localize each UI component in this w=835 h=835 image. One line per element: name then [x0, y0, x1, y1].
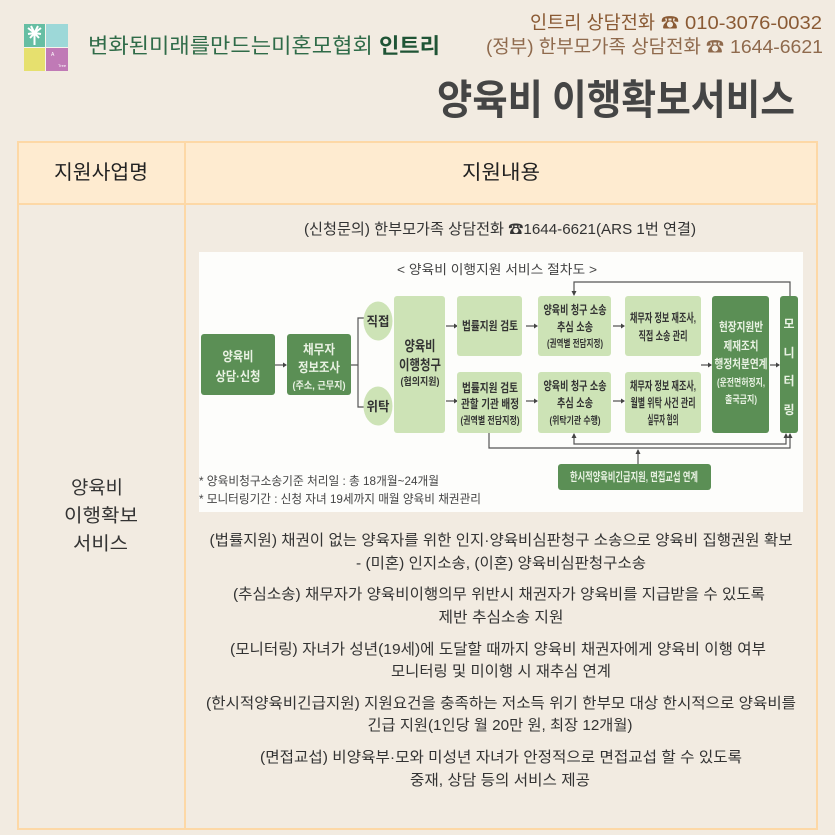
- description: visitation: (면접교섭) 비양육부·모와 미성년 자녀가 안정적으로 면접교섭 할 수 있도록: [260, 749, 742, 766]
- box: field support sanctions: 행정처분연계: [714, 356, 768, 371]
- box: child support claim: 양육비: [404, 338, 436, 354]
- box: claim lawsuit entrusted: 양육비 청구 소송: [544, 378, 606, 393]
- icon: organization logo: Tree: [58, 63, 67, 68]
- flowchart footnotes: * 양육비청구소송기준 처리일 : 총 18개월~24개월: [199, 474, 439, 488]
- description: legal support: (법률지원) 채권이 없는 양육자를 위한 인지·양육비심판청구 소송으로 양육비 집행권원 확보: [210, 532, 793, 549]
- box: debtor information survey: 정보조사: [298, 360, 340, 375]
- description: monitoring: (모니터링) 자녀가 성년(19세)에 도달할 때까지 양육비 채권자에게 양육비 이행 여부: [230, 641, 766, 658]
- title: 양육비: [437, 77, 543, 123]
- description: legal support: [210, 532, 793, 572]
- box: child support claim: [394, 296, 445, 433]
- flowchart footnotes: [199, 474, 481, 506]
- flowchart panel: child support procedure: [199, 252, 803, 512]
- box: field support sanctions: 제재조치: [724, 338, 758, 353]
- box: consultation and application: [201, 334, 275, 395]
- box: field support sanctions: 출국금지): [725, 394, 757, 406]
- title: 이행확보서비스: [552, 77, 795, 123]
- ellipse: direct: 직접: [366, 314, 390, 329]
- box: emergency support link: 한시적양육비긴급지원, 면접교섭 연계: [570, 469, 698, 484]
- phone contact lines: [486, 12, 823, 57]
- flowchart heading: < 양육비 이행지원 서비스 절차도 >: [397, 262, 597, 277]
- phone contact lines: 인트리 상담전화: [530, 12, 655, 33]
- box: claim lawsuit entrusted: (위탁기관 수행): [550, 414, 600, 427]
- description: collection lawsuit: 제반 추심소송 지원: [438, 609, 564, 626]
- service name cell: [64, 477, 138, 554]
- flowchart footnotes: * 모니터링기간 : 신청 자녀 19세까지 매월 양육비 채권관리: [199, 492, 481, 506]
- box: debtor reinvestigation entrusted: [625, 372, 701, 433]
- box: monitoring: 모: [783, 317, 795, 331]
- box: emergency support link: [558, 464, 711, 490]
- box: monitoring: [780, 296, 798, 433]
- table header row: [18, 142, 817, 204]
- box: debtor information survey: (주소, 근무지): [292, 380, 346, 392]
- phone contact lines: (정부) 한부모가족 상담전화: [486, 36, 701, 57]
- box: debtor reinvestigation direct: [625, 296, 701, 356]
- box: claim lawsuit direct: (권역별 전담지정): [547, 337, 603, 350]
- box: monitoring: 터: [783, 374, 795, 388]
- service name cell: 서비스: [73, 533, 128, 554]
- table header row: 지원사업명: [54, 161, 148, 184]
- description: emergency support: [206, 695, 796, 734]
- ellipse: direct: [364, 302, 392, 340]
- box: claim lawsuit direct: 추심 소송: [557, 320, 593, 334]
- description text block: [206, 532, 796, 789]
- box: legal review and agency assignment: [457, 372, 522, 433]
- description: visitation: 중재, 상담 등의 서비스 제공: [410, 772, 590, 789]
- box: claim lawsuit direct: 양육비 청구 소송: [544, 302, 606, 317]
- ellipse: entrusted: 위탁: [366, 399, 390, 414]
- table header row: 지원내용: [462, 161, 540, 184]
- box: debtor information survey: 채무자: [303, 342, 335, 357]
- service name cell: 양육비: [71, 477, 123, 498]
- connector lines: [275, 282, 790, 464]
- box: debtor reinvestigation direct: 채무자 정보 재조사,: [630, 310, 696, 325]
- support table: [18, 142, 817, 829]
- box: monitoring: 니: [783, 346, 795, 360]
- box: legal support review: [457, 296, 522, 356]
- box: legal support review: 법률지원 검토: [462, 319, 518, 333]
- box: field support sanctions: (운전면허정지,: [717, 377, 765, 389]
- service name cell: 이행확보: [64, 505, 138, 526]
- phone contact lines: 1644-6621: [730, 36, 823, 57]
- description: visitation: [260, 749, 742, 789]
- box: debtor reinvestigation entrusted: 월별 위탁 사건 관리: [630, 395, 696, 410]
- box: claim lawsuit entrusted: [538, 372, 611, 433]
- inquiry line: (신청문의) 한부모가족 상담전화 ☎1644-6621(ARS 1번 연결): [304, 221, 696, 238]
- description: collection lawsuit: [233, 586, 765, 626]
- box: legal review and agency assignment: 법률지원 검토: [462, 381, 518, 395]
- description: collection lawsuit: (추심소송) 채무자가 양육비이행의무 위반시 채권자가 양육비를 지급받을 수 있도록: [233, 586, 765, 603]
- ellipse: entrusted: [364, 386, 392, 426]
- phone contact lines: ☎: [706, 37, 724, 57]
- icon: organization logo: A: [51, 52, 55, 58]
- box: legal review and agency assignment: 관할 기관 배정: [461, 396, 519, 411]
- box: debtor reinvestigation entrusted: 채무자 정보 재조사,: [630, 378, 696, 393]
- box: claim lawsuit direct: [538, 296, 611, 356]
- title: [437, 77, 795, 123]
- box: child support claim: (협의지원): [400, 375, 440, 388]
- box: field support sanctions: 현장지원반: [719, 319, 763, 334]
- organization name: 변화된미래를만드는미혼모협회 인트리: [88, 35, 440, 58]
- phone contact lines: ☎: [661, 13, 679, 33]
- box: consultation and application: 상담·신청: [216, 369, 260, 384]
- box: monitoring: 링: [783, 403, 795, 417]
- icon: organization logo: [24, 24, 68, 71]
- description: monitoring: [230, 641, 766, 680]
- box: field support sanctions: [712, 296, 769, 433]
- description: legal support: - (미혼) 인지소송, (이혼) 양육비심판청구소송: [356, 555, 646, 572]
- description: emergency support: 긴급 지원(1인당 월 20만 원, 최장 12개월): [368, 717, 632, 734]
- box: debtor reinvestigation direct: 직접 소송 관리: [638, 329, 688, 343]
- box: debtor reinvestigation entrusted: 실무자 협의: [648, 412, 678, 427]
- phone contact lines: 010-3076-0032: [685, 12, 822, 33]
- arrowheads: [283, 291, 792, 454]
- description: emergency support: (한시적양육비긴급지원) 지원요건을 충족하는 저소득 위기 한부모 대상 한시적으로 양육비를: [206, 695, 796, 712]
- description: monitoring: 모니터링 및 미이행 시 재추심 연계: [391, 663, 611, 680]
- box: child support claim: 이행청구: [399, 357, 441, 373]
- box: legal review and agency assignment: (권역별 전담지정): [460, 414, 520, 427]
- box: debtor information survey: [287, 334, 351, 395]
- box: claim lawsuit entrusted: 추심 소송: [557, 396, 593, 410]
- box: consultation and application: 양육비: [222, 349, 254, 364]
